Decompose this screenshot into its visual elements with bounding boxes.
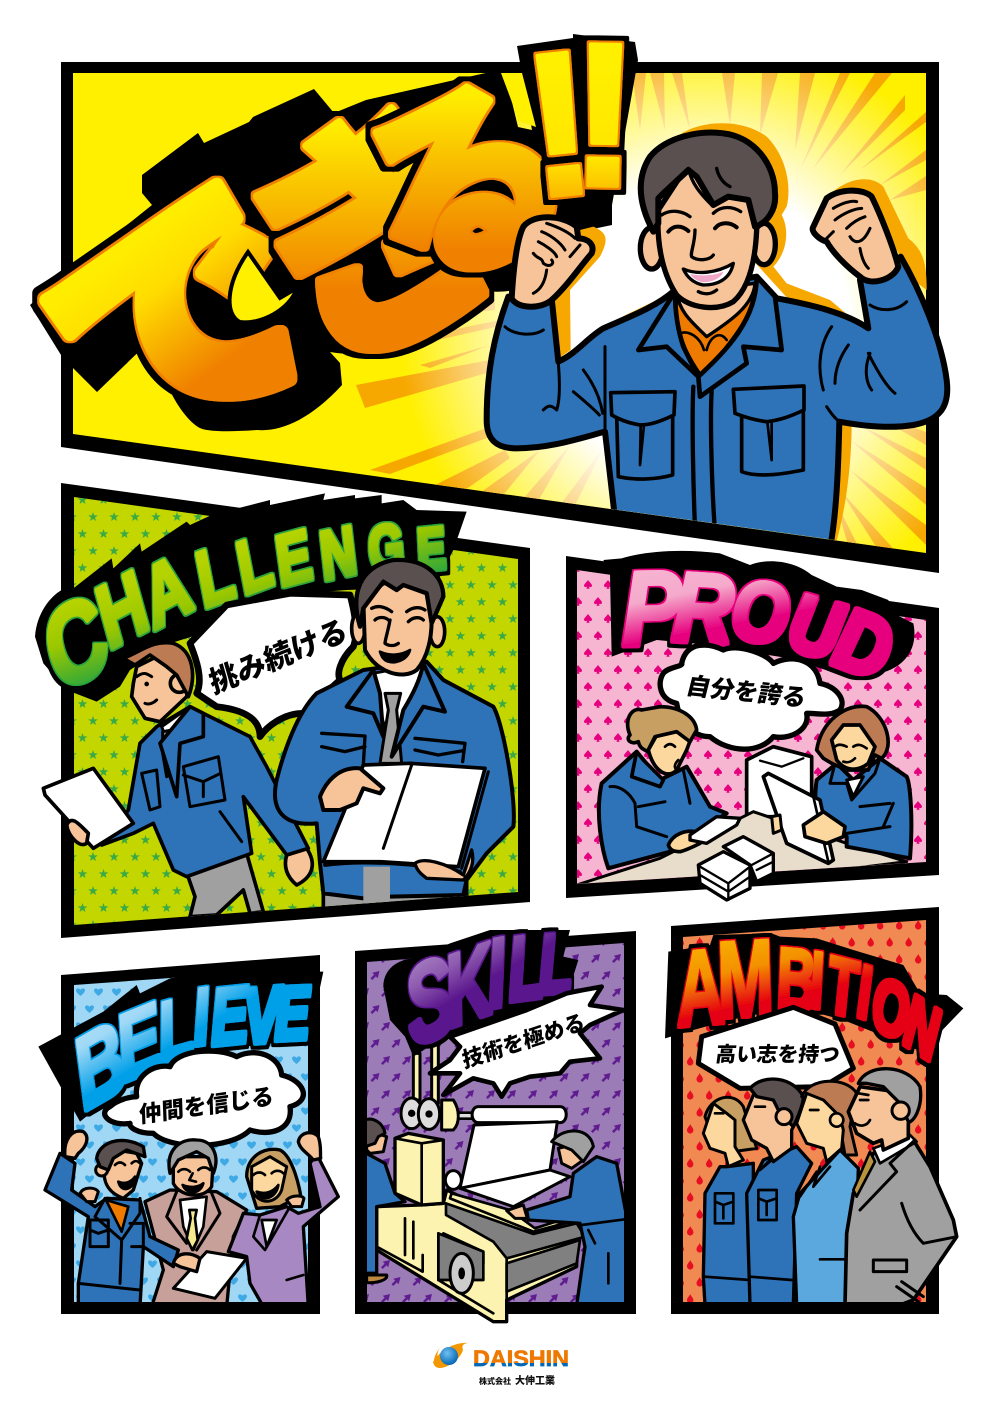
right fist (813, 191, 898, 281)
neck (677, 283, 755, 337)
proud heading (603, 549, 914, 700)
table (577, 812, 907, 885)
machine column (395, 1133, 443, 1205)
panel: believe (38, 955, 338, 1314)
man with open book (275, 560, 514, 910)
believe heading text: E (107, 984, 171, 1102)
laughing mouth (683, 263, 733, 285)
woman profile in light blue suit (793, 1081, 858, 1305)
challenge heading text: H (87, 551, 157, 668)
ambition heading text: N (897, 980, 947, 1078)
printing machine (377, 1098, 585, 1322)
ambition heading text: M (716, 917, 775, 1041)
shirt collar points (680, 332, 727, 350)
challenge speech bubble (190, 593, 356, 737)
ambition heading backing (665, 933, 963, 1052)
panel: skill (355, 915, 636, 1322)
reading hands (803, 812, 845, 843)
title letter de: で (7, 139, 363, 506)
believe heading text: E (273, 970, 312, 1056)
woman reading document (815, 706, 911, 858)
open book (323, 763, 485, 867)
skill caption: 技術を極める (460, 1010, 587, 1073)
title lettering できる!! (7, 0, 640, 506)
challenge heading (32, 493, 467, 716)
hero frame (61, 62, 939, 573)
hair (641, 133, 775, 232)
facial features (662, 168, 741, 294)
belt (446, 1203, 585, 1258)
believe frame (61, 955, 320, 1314)
roller eyes (401, 1098, 422, 1129)
speed line burst (356, 73, 926, 549)
drive wheel (450, 1253, 473, 1293)
skill heading (383, 915, 578, 1069)
proud heading text: U (781, 576, 851, 679)
challenge heading text: G (366, 509, 406, 585)
believe heading text: V (242, 971, 286, 1061)
proud heading text: D (825, 589, 902, 700)
collars (638, 277, 782, 397)
walking man head (132, 650, 190, 722)
believe heading (38, 955, 323, 1130)
pointing hand (320, 768, 383, 810)
woman profile in blue uniform (703, 1097, 757, 1305)
paper sheet (460, 1122, 557, 1188)
believe cloud bubble (105, 1051, 303, 1145)
challenge heading text: E (416, 515, 447, 583)
believe heading text: I (190, 970, 213, 1062)
challenge caption: 挑み続ける (206, 614, 351, 701)
ambition hexagon bubble (698, 1007, 853, 1088)
challenge heading text: E (271, 514, 316, 602)
paper roll (472, 1107, 566, 1123)
worker raised fist and shoulder hand (65, 1131, 87, 1158)
man with raised fists (487, 123, 947, 550)
stacked paper boxes (698, 837, 773, 900)
believe heading text: L (152, 979, 199, 1080)
skill arrow background (367, 943, 624, 1302)
white box tower (747, 747, 812, 817)
skill frame (355, 931, 636, 1314)
panel: challenge (32, 483, 530, 938)
proud heading text: P (621, 549, 684, 668)
proud heading backing (603, 551, 914, 675)
ambition heading text: T (824, 940, 862, 1035)
proud spade background (577, 570, 926, 884)
skill heading text: L (537, 915, 573, 1011)
proud heading text: R (671, 552, 736, 665)
tablet (43, 768, 133, 848)
challenge heading backing (35, 493, 467, 702)
walking man with tablet (43, 643, 312, 917)
ambition heading (665, 917, 963, 1078)
sleeve and body creases (505, 302, 907, 430)
hero yellow background (73, 73, 926, 553)
lower paper (460, 1170, 570, 1207)
panel: dekiru hero (7, 0, 947, 580)
skill heading backing (383, 930, 578, 1057)
operator at left (363, 1119, 405, 1283)
proud caption: 自分を誇る (683, 673, 809, 712)
title letter ru: る (328, 43, 603, 330)
orange halo (553, 123, 927, 550)
ambition heading text: I (807, 935, 827, 1026)
believe heading backing (38, 955, 323, 1122)
ambition caption: 高い志を持つ (714, 1042, 841, 1066)
man profile in blue uniform (743, 1079, 812, 1305)
challenge star background (74, 497, 518, 925)
title black backing (30, 34, 638, 431)
ears (640, 228, 663, 269)
ambition flame background (683, 920, 926, 1302)
left fist (512, 217, 593, 307)
logo: daishin (433, 1343, 569, 1387)
woman raised fist (298, 1133, 321, 1160)
believe heading text: B (62, 1000, 138, 1130)
operator at right (507, 1131, 627, 1305)
challenge heading text: L (231, 518, 278, 611)
believe heading text: E (208, 968, 252, 1062)
worker in blue jacket (45, 1131, 178, 1307)
challenge heading text: L (190, 526, 240, 625)
exclamation marks: ! (514, 7, 606, 242)
skill heading text: K (437, 921, 503, 1047)
ambition heading text: O (866, 958, 917, 1059)
shared paper and pointing hand (173, 1252, 247, 1298)
exclamation marks: ! (568, 0, 640, 230)
panel: proud (566, 549, 939, 900)
face (658, 167, 757, 307)
yellow gap by exclamation (501, 73, 536, 127)
ambition frame (671, 907, 939, 1314)
yellow counter of de (230, 252, 297, 322)
ambition heading text: I (853, 950, 876, 1036)
executive in beige suit (145, 1140, 247, 1307)
believe caption: 仲間を信じる (139, 1083, 274, 1128)
proud cloud bubble (660, 645, 842, 749)
ambition heading text: B (775, 928, 818, 1031)
book man head (352, 613, 365, 643)
woman with ponytail (599, 707, 740, 868)
ambition heading text: A (674, 926, 726, 1049)
skill heading text: I (483, 918, 511, 1029)
title letter ki: き (202, 54, 558, 421)
challenge heading text: A (134, 536, 200, 648)
skill heading text: L (505, 916, 547, 1021)
challenge frame (61, 483, 530, 938)
proud heading text: O (727, 560, 794, 663)
executive profile in gray suit (845, 1069, 957, 1305)
believe heart background (74, 968, 308, 1302)
woman in purple suit (228, 1133, 338, 1307)
machine posts (413, 1043, 438, 1103)
jacket (487, 257, 947, 548)
company name: 株式会社 大伸工業 (479, 1374, 555, 1387)
challenge heading text: N (316, 511, 360, 595)
logo mark (433, 1343, 468, 1368)
document (763, 773, 833, 863)
challenge heading text: C (32, 569, 120, 716)
skill heading text: S (395, 931, 463, 1069)
orange shirt (678, 300, 752, 373)
challenge figures (43, 560, 514, 917)
zipper placket (693, 387, 695, 528)
skill spiky bubble (430, 987, 623, 1097)
proud frame (566, 556, 939, 898)
chest pockets (617, 415, 673, 479)
DAISHIN wordmark: DAISHIN (473, 1346, 569, 1371)
panel: ambition (665, 907, 963, 1314)
machine base (377, 1190, 577, 1322)
